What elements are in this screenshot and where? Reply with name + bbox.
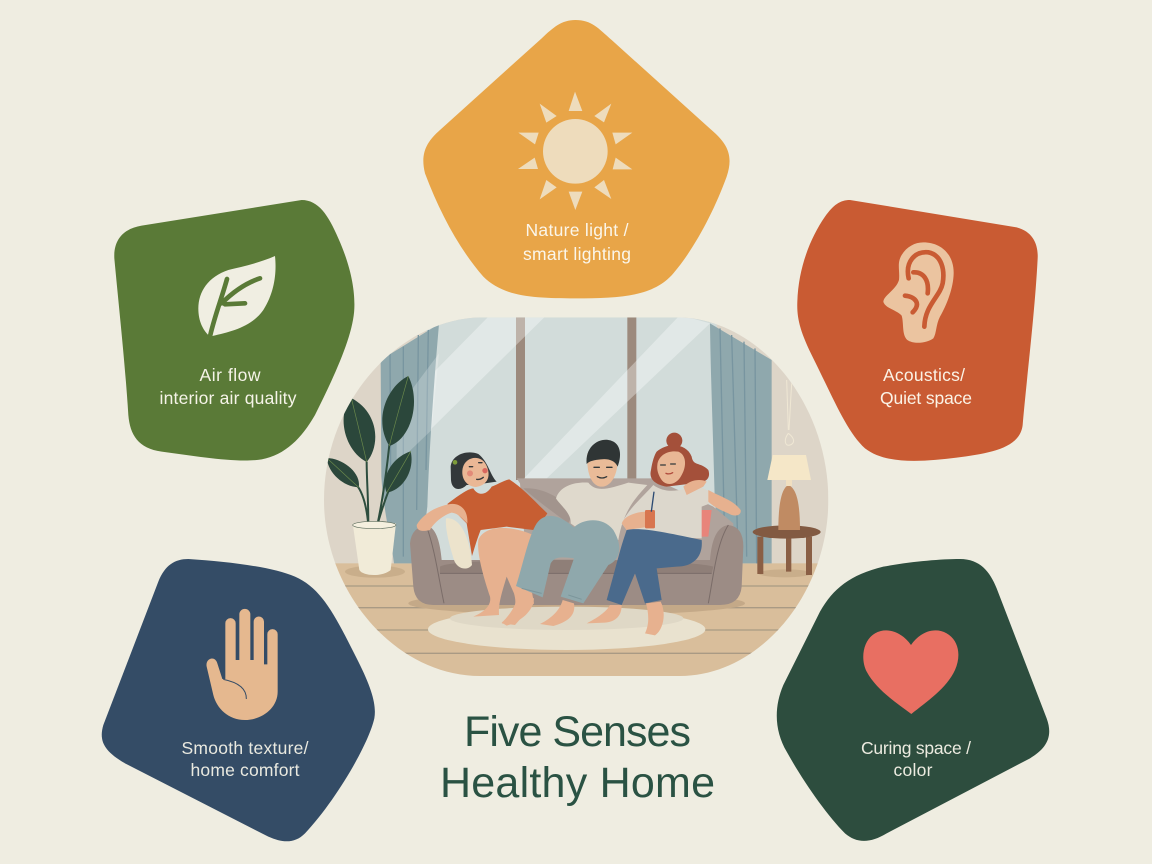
label: air flow: interior air quality [160,388,297,408]
panel: touch, smooth texture [102,559,375,841]
label: acoustics: Quiet space [880,388,972,408]
person: center man [502,440,647,626]
floor lamp table [753,455,821,577]
panel shape: curing space [777,559,1049,841]
panel shape: touch [102,559,375,841]
curtain: right [710,323,772,563]
panel shape: sight [423,20,730,298]
panel: smell, air flow [114,200,354,461]
label: air flow: Air flow [200,365,261,385]
cushion [446,518,472,569]
label: nature light: Nature light / [526,220,629,240]
icon: leaf [198,256,276,336]
icon: heart [863,630,958,714]
pendant ornament [785,380,794,445]
person: right woman [587,433,741,635]
label: curing space: Curing space / [861,738,971,758]
icon: sun [518,92,632,210]
title: Five Senses [464,708,691,756]
curtain: left [381,324,439,563]
wall and floor [320,310,840,680]
label: curing space: color [894,760,933,780]
label: smooth texture: home comfort [190,760,300,780]
label: smooth texture: Smooth texture/ [182,738,309,758]
panel: hearing, acoustics [797,200,1038,461]
title: Healthy Home [440,759,715,807]
rug [408,600,745,650]
panel shape: hearing [797,200,1038,461]
label: acoustics: Acoustics/ [883,365,965,385]
icon: ear [883,242,954,343]
window [426,318,716,560]
panel shape: smell [114,200,354,461]
label: nature light: smart lighting [523,244,631,264]
person: left woman [417,452,547,625]
panel: sight, nature light [423,20,730,298]
icon: hand [206,609,278,720]
sofa [410,478,743,605]
potted plant [327,376,414,578]
panel: taste and mood, curing space [777,559,1049,841]
illustration: family on a sofa in a living room [320,310,840,680]
